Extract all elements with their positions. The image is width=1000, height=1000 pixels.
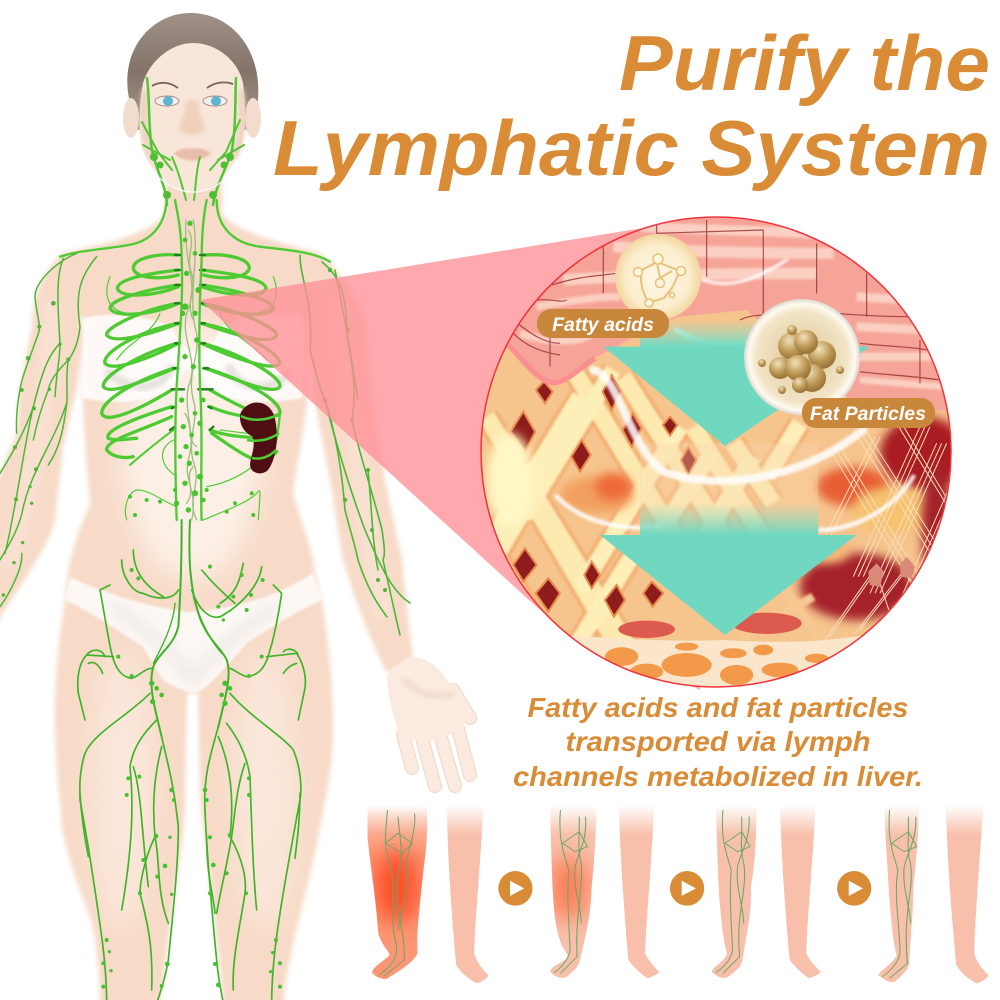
right thigh vessels xyxy=(205,727,223,1000)
circle border xyxy=(481,217,951,687)
skin rim xyxy=(508,345,595,383)
left eyebrow xyxy=(152,83,178,88)
particles xyxy=(758,325,844,394)
abdominal vessels xyxy=(125,430,260,520)
torso inner light xyxy=(122,320,262,580)
white swoosh curves xyxy=(557,260,913,530)
right ear xyxy=(245,98,261,138)
fatty acids label xyxy=(537,309,669,338)
healthy leg xyxy=(946,805,988,983)
spine duct xyxy=(175,260,202,520)
head xyxy=(123,13,261,192)
underwear shading xyxy=(110,605,280,680)
central ducts and pelvic loops xyxy=(151,520,229,737)
bright left glow xyxy=(487,433,533,527)
underwear xyxy=(65,573,322,693)
fatty acids label: Fatty acids xyxy=(552,314,654,336)
swollen leg xyxy=(550,805,597,978)
left ear xyxy=(123,98,139,138)
title: Lymphatic System xyxy=(273,104,990,192)
lower band ghost between arrows xyxy=(640,443,818,522)
description text: channels metabolized in liver. xyxy=(513,761,923,792)
main lattice bands xyxy=(482,364,817,640)
lymph vessels of left arm xyxy=(0,253,97,607)
fat tissue base xyxy=(482,310,949,642)
stage 4 legs xyxy=(878,805,988,983)
stage 3 vessels xyxy=(716,810,750,973)
title: Purify the xyxy=(619,19,990,107)
left thigh light xyxy=(92,650,152,930)
palm xyxy=(387,657,465,741)
fingers and thumb outline xyxy=(403,690,470,786)
skin light bands xyxy=(520,227,943,387)
hot centre xyxy=(376,850,418,923)
title xyxy=(273,19,990,192)
second teal arrow xyxy=(600,503,857,635)
leg progression strip xyxy=(363,805,988,983)
play button 1 xyxy=(498,871,533,906)
spine network xyxy=(185,220,197,520)
right tissue colour: dark red bottom xyxy=(800,553,913,620)
play button 2 xyxy=(670,871,704,906)
nodes xyxy=(128,221,255,517)
body silhouette xyxy=(0,180,413,1000)
chin outline xyxy=(140,150,246,192)
overall warm tint xyxy=(368,811,427,979)
healthy leg xyxy=(619,805,659,978)
arm lights xyxy=(6,300,385,620)
human figure with lymphatic system xyxy=(0,13,470,1000)
groin loops left xyxy=(100,585,152,678)
palm shadow xyxy=(405,680,452,696)
description text: transported via lymph xyxy=(566,726,870,757)
first teal arrow xyxy=(603,320,870,446)
stage 1 vessels xyxy=(379,810,415,977)
face xyxy=(139,43,245,192)
nodes xyxy=(101,565,282,989)
stage 2 legs xyxy=(549,805,659,978)
fat particles label xyxy=(802,398,935,428)
fat particles label: Fat Particles xyxy=(810,403,926,425)
hair xyxy=(127,13,258,130)
description text: Fatty acids and fat particles xyxy=(528,692,908,723)
swollen leg xyxy=(368,805,427,979)
right thigh light xyxy=(235,650,295,930)
recovered leg xyxy=(878,805,919,982)
hand xyxy=(387,657,470,786)
right eye xyxy=(203,96,227,106)
bubble xyxy=(744,299,860,415)
right tissue colour: dark red rim xyxy=(914,475,948,570)
orange blotch xyxy=(560,477,633,513)
bra xyxy=(82,314,304,402)
left thigh vessels xyxy=(157,737,178,1000)
ribs across spleen xyxy=(241,415,279,459)
healthy leg xyxy=(447,805,488,983)
lower tissue orange xyxy=(810,537,850,563)
right iris xyxy=(211,96,221,106)
healthy leg xyxy=(780,805,821,978)
magnifying cone xyxy=(200,222,700,690)
molecule atoms xyxy=(634,254,686,307)
stage 4 vessels xyxy=(883,810,917,978)
inflammation glow xyxy=(368,811,427,979)
lymph vessels of right arm xyxy=(300,255,410,635)
fatty acids molecule bubble xyxy=(615,234,701,320)
play button 3 xyxy=(837,871,871,906)
left eye xyxy=(155,96,179,106)
stage 3 legs xyxy=(712,805,821,978)
stage 2 vessels xyxy=(554,810,588,973)
neck to shoulder vessels xyxy=(60,200,330,262)
nose xyxy=(179,100,205,134)
fine fibre bundles right xyxy=(824,426,947,640)
lower reddish cells xyxy=(618,613,802,638)
right eyebrow xyxy=(207,82,233,88)
fibre star knots xyxy=(868,557,915,587)
molecule xyxy=(640,262,680,303)
stage 1 legs xyxy=(363,805,488,983)
face side shading xyxy=(144,90,242,158)
lymph vessels of pelvis and thighs xyxy=(78,520,305,1000)
bubble xyxy=(615,234,701,320)
rib root ticks xyxy=(170,255,213,430)
right tissue colour: yellow band xyxy=(853,487,933,533)
bra cup shading xyxy=(106,365,292,387)
left iris xyxy=(163,96,173,106)
lymph vessels of head and neck xyxy=(142,78,244,205)
fat particles bubble xyxy=(744,299,860,415)
skin grid lines xyxy=(513,220,940,383)
dark diamonds xyxy=(511,375,696,617)
fat cells xyxy=(605,643,828,685)
spleen xyxy=(240,403,277,473)
groin loops right xyxy=(230,585,282,677)
red-orange blotch xyxy=(595,473,632,500)
lips xyxy=(174,148,211,160)
fat layer xyxy=(571,636,862,686)
reduced leg xyxy=(712,805,757,978)
inflammation glow xyxy=(549,855,589,922)
arm branch vessels xyxy=(107,277,276,360)
right tissue colour: orange band xyxy=(817,467,890,507)
right tissue colour: dark red top xyxy=(880,417,967,490)
fingers and thumb xyxy=(403,690,470,786)
lymph vessels of chest: ribs and thoracic duct xyxy=(60,200,330,520)
magnified tissue circle xyxy=(480,216,952,688)
skin surface layer xyxy=(508,218,946,410)
ribs xyxy=(102,255,280,465)
description text xyxy=(513,692,923,792)
